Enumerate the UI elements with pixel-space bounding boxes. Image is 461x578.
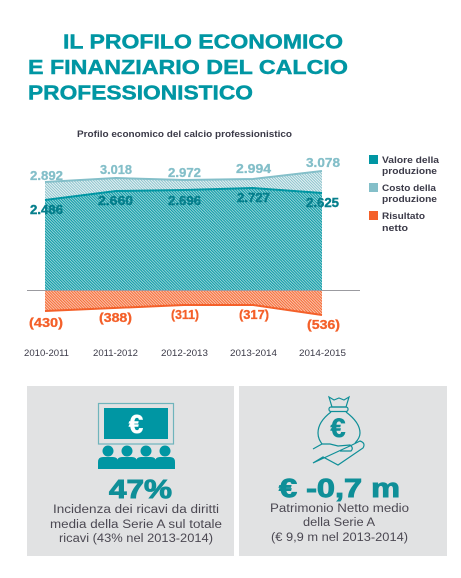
stat: -0,7 m: € -0,7 m: [279, 475, 400, 503]
cost labels: 3.018: [100, 163, 132, 177]
year labels: 2014-2015: [299, 348, 346, 358]
legend: costo della produzione: [369, 183, 437, 205]
cost labels: 3.078: [306, 156, 340, 170]
axis line: [27, 290, 360, 292]
year labels: 2012-2013: [161, 348, 208, 358]
value labels: 2.727: [237, 191, 270, 205]
legend: risultato netto: Risultato: [382, 211, 425, 222]
area: risultato netto: [45, 290, 322, 315]
chart heading: Profilo economico del calcio professionistico: [77, 129, 292, 140]
area: valore della produzione: [45, 188, 322, 290]
legend: costo della produzione: Costo della: [382, 183, 437, 194]
icon: screen with euro and audience: [98, 404, 175, 469]
caption: diritti media: ricavi (43% nel 2013-2014): [59, 533, 213, 545]
line: costo: [45, 171, 322, 182]
legend: valore della produzione: produzione: [382, 166, 437, 177]
legend: [369, 155, 440, 234]
year labels: [24, 348, 346, 358]
caption: patrimonio netto: [270, 503, 409, 544]
net result labels: (311): [171, 308, 199, 322]
stat: 47%: 47%: [109, 476, 172, 504]
net result labels: (430): [29, 316, 63, 330]
icon: money bag on hand: €: [330, 413, 346, 443]
caption: patrimonio netto: (€ 9,9 m nel 2013-2014): [271, 532, 408, 544]
area chart: [27, 171, 360, 315]
panel: patrimonio netto: [239, 386, 447, 556]
legend: costo della produzione: produzione: [382, 194, 437, 205]
cost labels: 2.972: [168, 166, 201, 180]
icon: screen with euro and audience: €: [129, 409, 143, 439]
caption: patrimonio netto: Patrimonio Netto medio: [270, 503, 409, 515]
line: valore: [45, 188, 322, 200]
legend: valore della produzione: [369, 155, 440, 177]
title: PROFESSIONISTICO: [28, 82, 253, 104]
title: E FINANZIARIO DEL CALCIO: [28, 56, 348, 79]
cost labels: [30, 156, 340, 183]
cost labels: 2.994: [236, 162, 271, 176]
value labels: 2.625: [306, 196, 339, 210]
caption: diritti media: media della Serie A sul totale: [50, 519, 222, 531]
year labels: 2013-2014: [230, 348, 277, 358]
net result labels: [29, 308, 340, 332]
legend: valore della produzione: Valore della: [382, 155, 440, 166]
legend: risultato netto: [369, 211, 425, 234]
caption: patrimonio netto: della Serie A: [303, 517, 375, 529]
value labels: 2.486: [30, 203, 63, 217]
legend: risultato netto: netto: [382, 223, 408, 234]
value labels: 2.696: [168, 194, 201, 208]
caption: diritti media: Incidenza dei ricavi da diritti: [53, 504, 219, 516]
net result labels: (536): [307, 318, 340, 332]
panel: diritti media: [27, 386, 234, 556]
year labels: 2010-2011: [24, 348, 69, 358]
area: costo della produzione: [45, 171, 322, 200]
year labels: 2011-2012: [93, 348, 138, 358]
title: [28, 30, 348, 104]
net result labels: (388): [99, 311, 132, 325]
cost labels: 2.892: [30, 169, 63, 183]
line: risultato: [45, 305, 322, 315]
caption: diritti media: [50, 504, 222, 545]
icon: money bag on hand: [313, 397, 364, 465]
net result labels: (317): [239, 308, 269, 322]
title: IL PROFILO ECONOMICO: [63, 30, 343, 54]
value labels: [30, 191, 339, 217]
value labels: 2.660: [98, 194, 133, 208]
